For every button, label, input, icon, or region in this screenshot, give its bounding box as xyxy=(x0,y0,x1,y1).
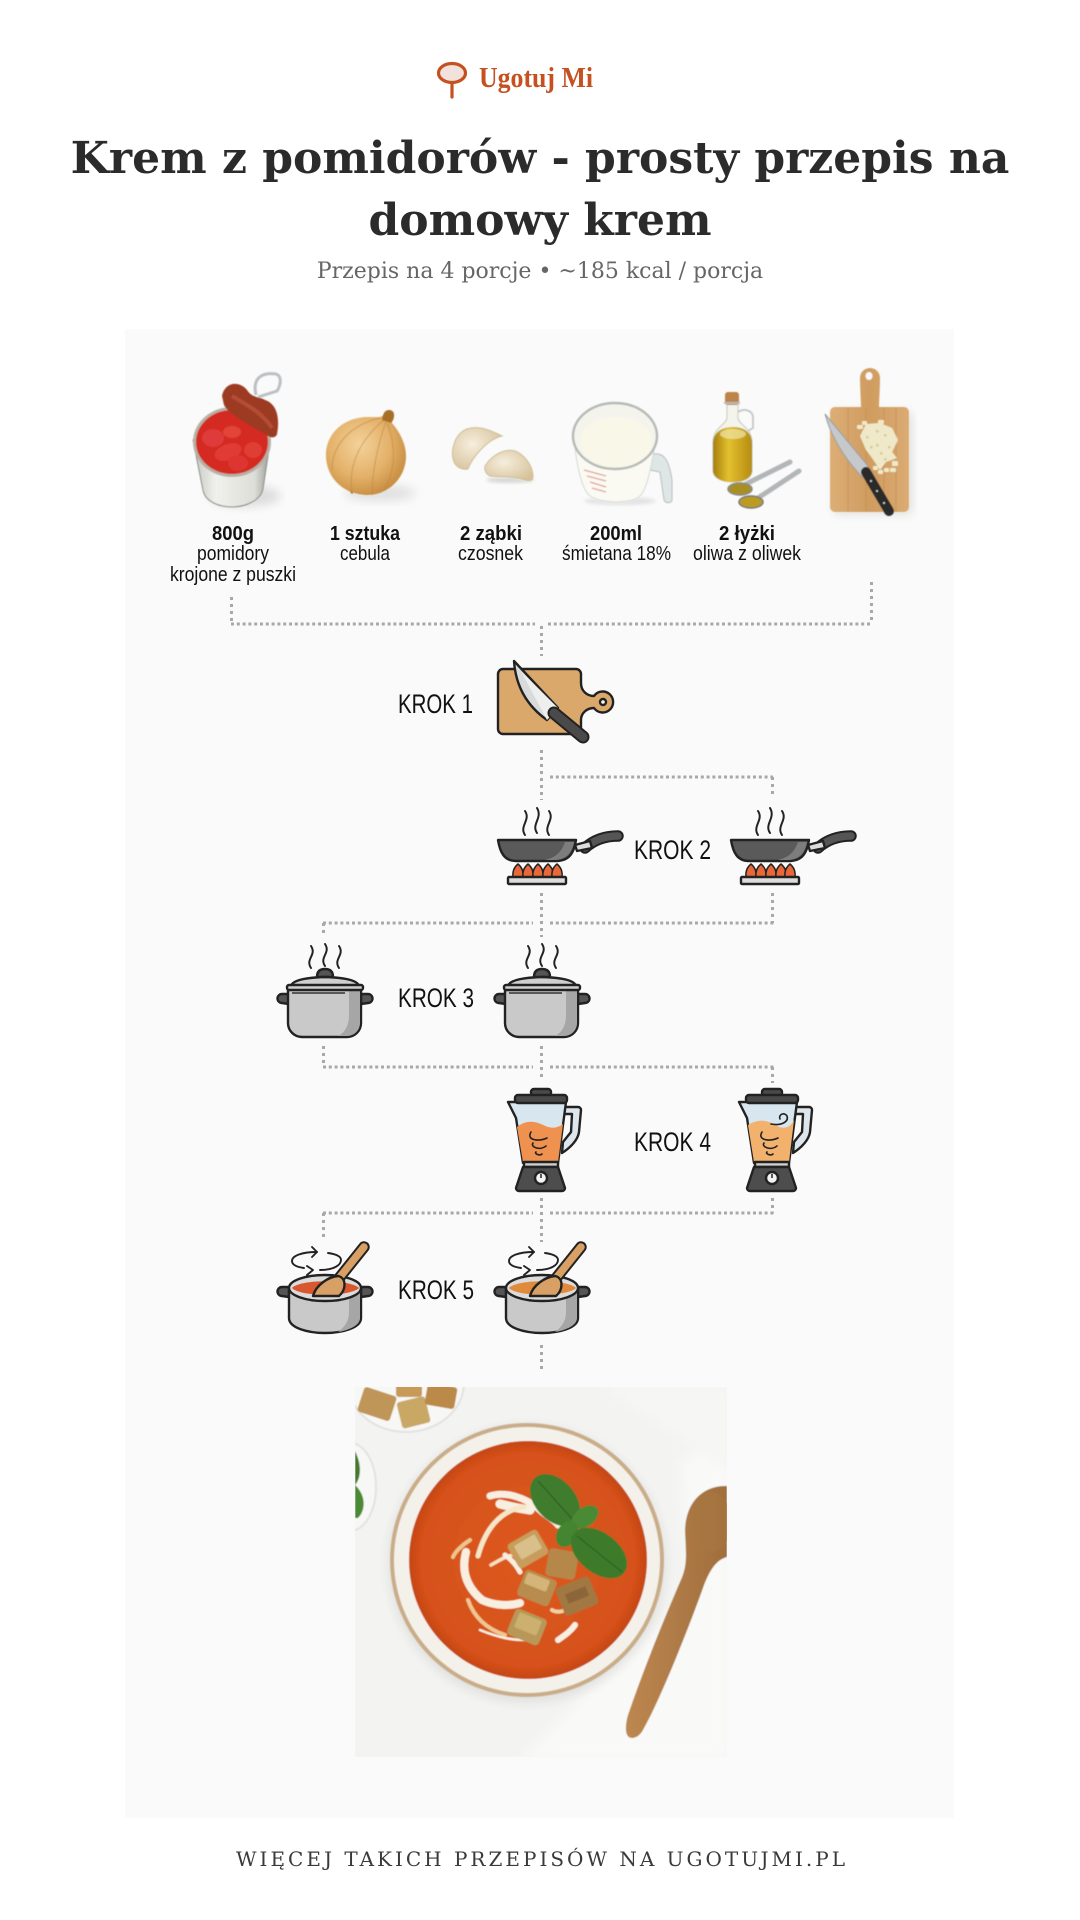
icon: stirring pot, left xyxy=(278,1247,372,1333)
label: onion: cebula xyxy=(340,543,391,565)
label: cream: 200ml xyxy=(590,523,642,545)
ingredient: olive oil with spoons xyxy=(713,392,799,508)
panel: recipe flow xyxy=(125,329,954,1818)
wooden spoon xyxy=(626,1486,732,1738)
small basil bowl xyxy=(355,1443,377,1531)
title: domowy krem xyxy=(368,195,712,246)
ingredient labels xyxy=(170,523,802,586)
label: garlic: 2 ząbki xyxy=(460,523,522,545)
ingredient row xyxy=(193,368,912,514)
icon: cutting board and knife xyxy=(498,661,613,737)
label: step 2: KROK 2 xyxy=(634,835,711,865)
step 1 xyxy=(398,661,613,737)
label: tomatoes: 800g xyxy=(212,523,254,545)
label: cream xyxy=(562,523,671,565)
step 5 xyxy=(278,1247,590,1333)
label: step 5: KROK 5 xyxy=(398,1275,474,1305)
icon: blender, right xyxy=(739,1089,812,1191)
icon: logo spoon xyxy=(438,64,466,97)
icon: steaming pot, right xyxy=(494,944,590,1037)
label: olive oil: oliwa z oliwek xyxy=(693,543,802,565)
label: cream: śmietana 18% xyxy=(562,543,671,565)
cream swirl xyxy=(453,1494,575,1640)
photo: finished tomato soup xyxy=(355,1387,727,1739)
icon: pan on burner, right xyxy=(731,808,851,884)
basil leaves xyxy=(530,1474,628,1579)
label: tomatoes xyxy=(170,523,296,586)
brand name: Ugotuj Mi xyxy=(479,62,593,94)
ingredient: cream in measuring cup xyxy=(573,403,672,505)
ingredient: canned tomatoes xyxy=(193,374,281,507)
croutons xyxy=(506,1528,599,1646)
brand logo xyxy=(438,62,593,97)
label: onion xyxy=(330,523,401,565)
icon: blender, left xyxy=(508,1089,581,1191)
title xyxy=(71,133,1009,246)
ingredient: garlic xyxy=(453,428,534,483)
title: Krem z pomidorów - prosty przepis na xyxy=(71,133,1009,184)
icon: stirring pot, right xyxy=(494,1247,590,1333)
napkin folds xyxy=(726,1486,727,1557)
label: tomatoes: krojone z puszki xyxy=(170,564,296,586)
label: tomatoes: pomidory xyxy=(197,543,269,565)
soup bowl xyxy=(388,1423,666,1703)
step 3 xyxy=(278,944,590,1037)
label: olive oil: 2 łyżki xyxy=(719,523,775,545)
subtitle: Przepis na 4 porcje • ~185 kcal / porcja xyxy=(317,259,763,284)
label: garlic xyxy=(458,523,524,565)
label: step 1: KROK 1 xyxy=(398,689,473,719)
label: garlic: czosnek xyxy=(458,543,524,565)
step 2 xyxy=(498,808,851,884)
small crouton bowl xyxy=(355,1387,465,1433)
icon: steaming pot, left xyxy=(278,944,372,1037)
ingredient: cutting board with chopped onion xyxy=(825,368,912,514)
label: olive oil xyxy=(693,523,802,565)
label: onion: 1 sztuka xyxy=(330,523,401,545)
flow connectors xyxy=(231,582,872,1373)
icon: pan on burner, left xyxy=(498,808,618,884)
ingredient: onion xyxy=(326,410,416,501)
footer call to action: WIĘCEJ TAKICH PRZEPISÓW NA UGOTUJMI.PL xyxy=(236,1846,845,1871)
label: step 3: KROK 3 xyxy=(398,983,474,1013)
step 4 xyxy=(508,1089,812,1191)
label: step 4: KROK 4 xyxy=(634,1127,711,1157)
